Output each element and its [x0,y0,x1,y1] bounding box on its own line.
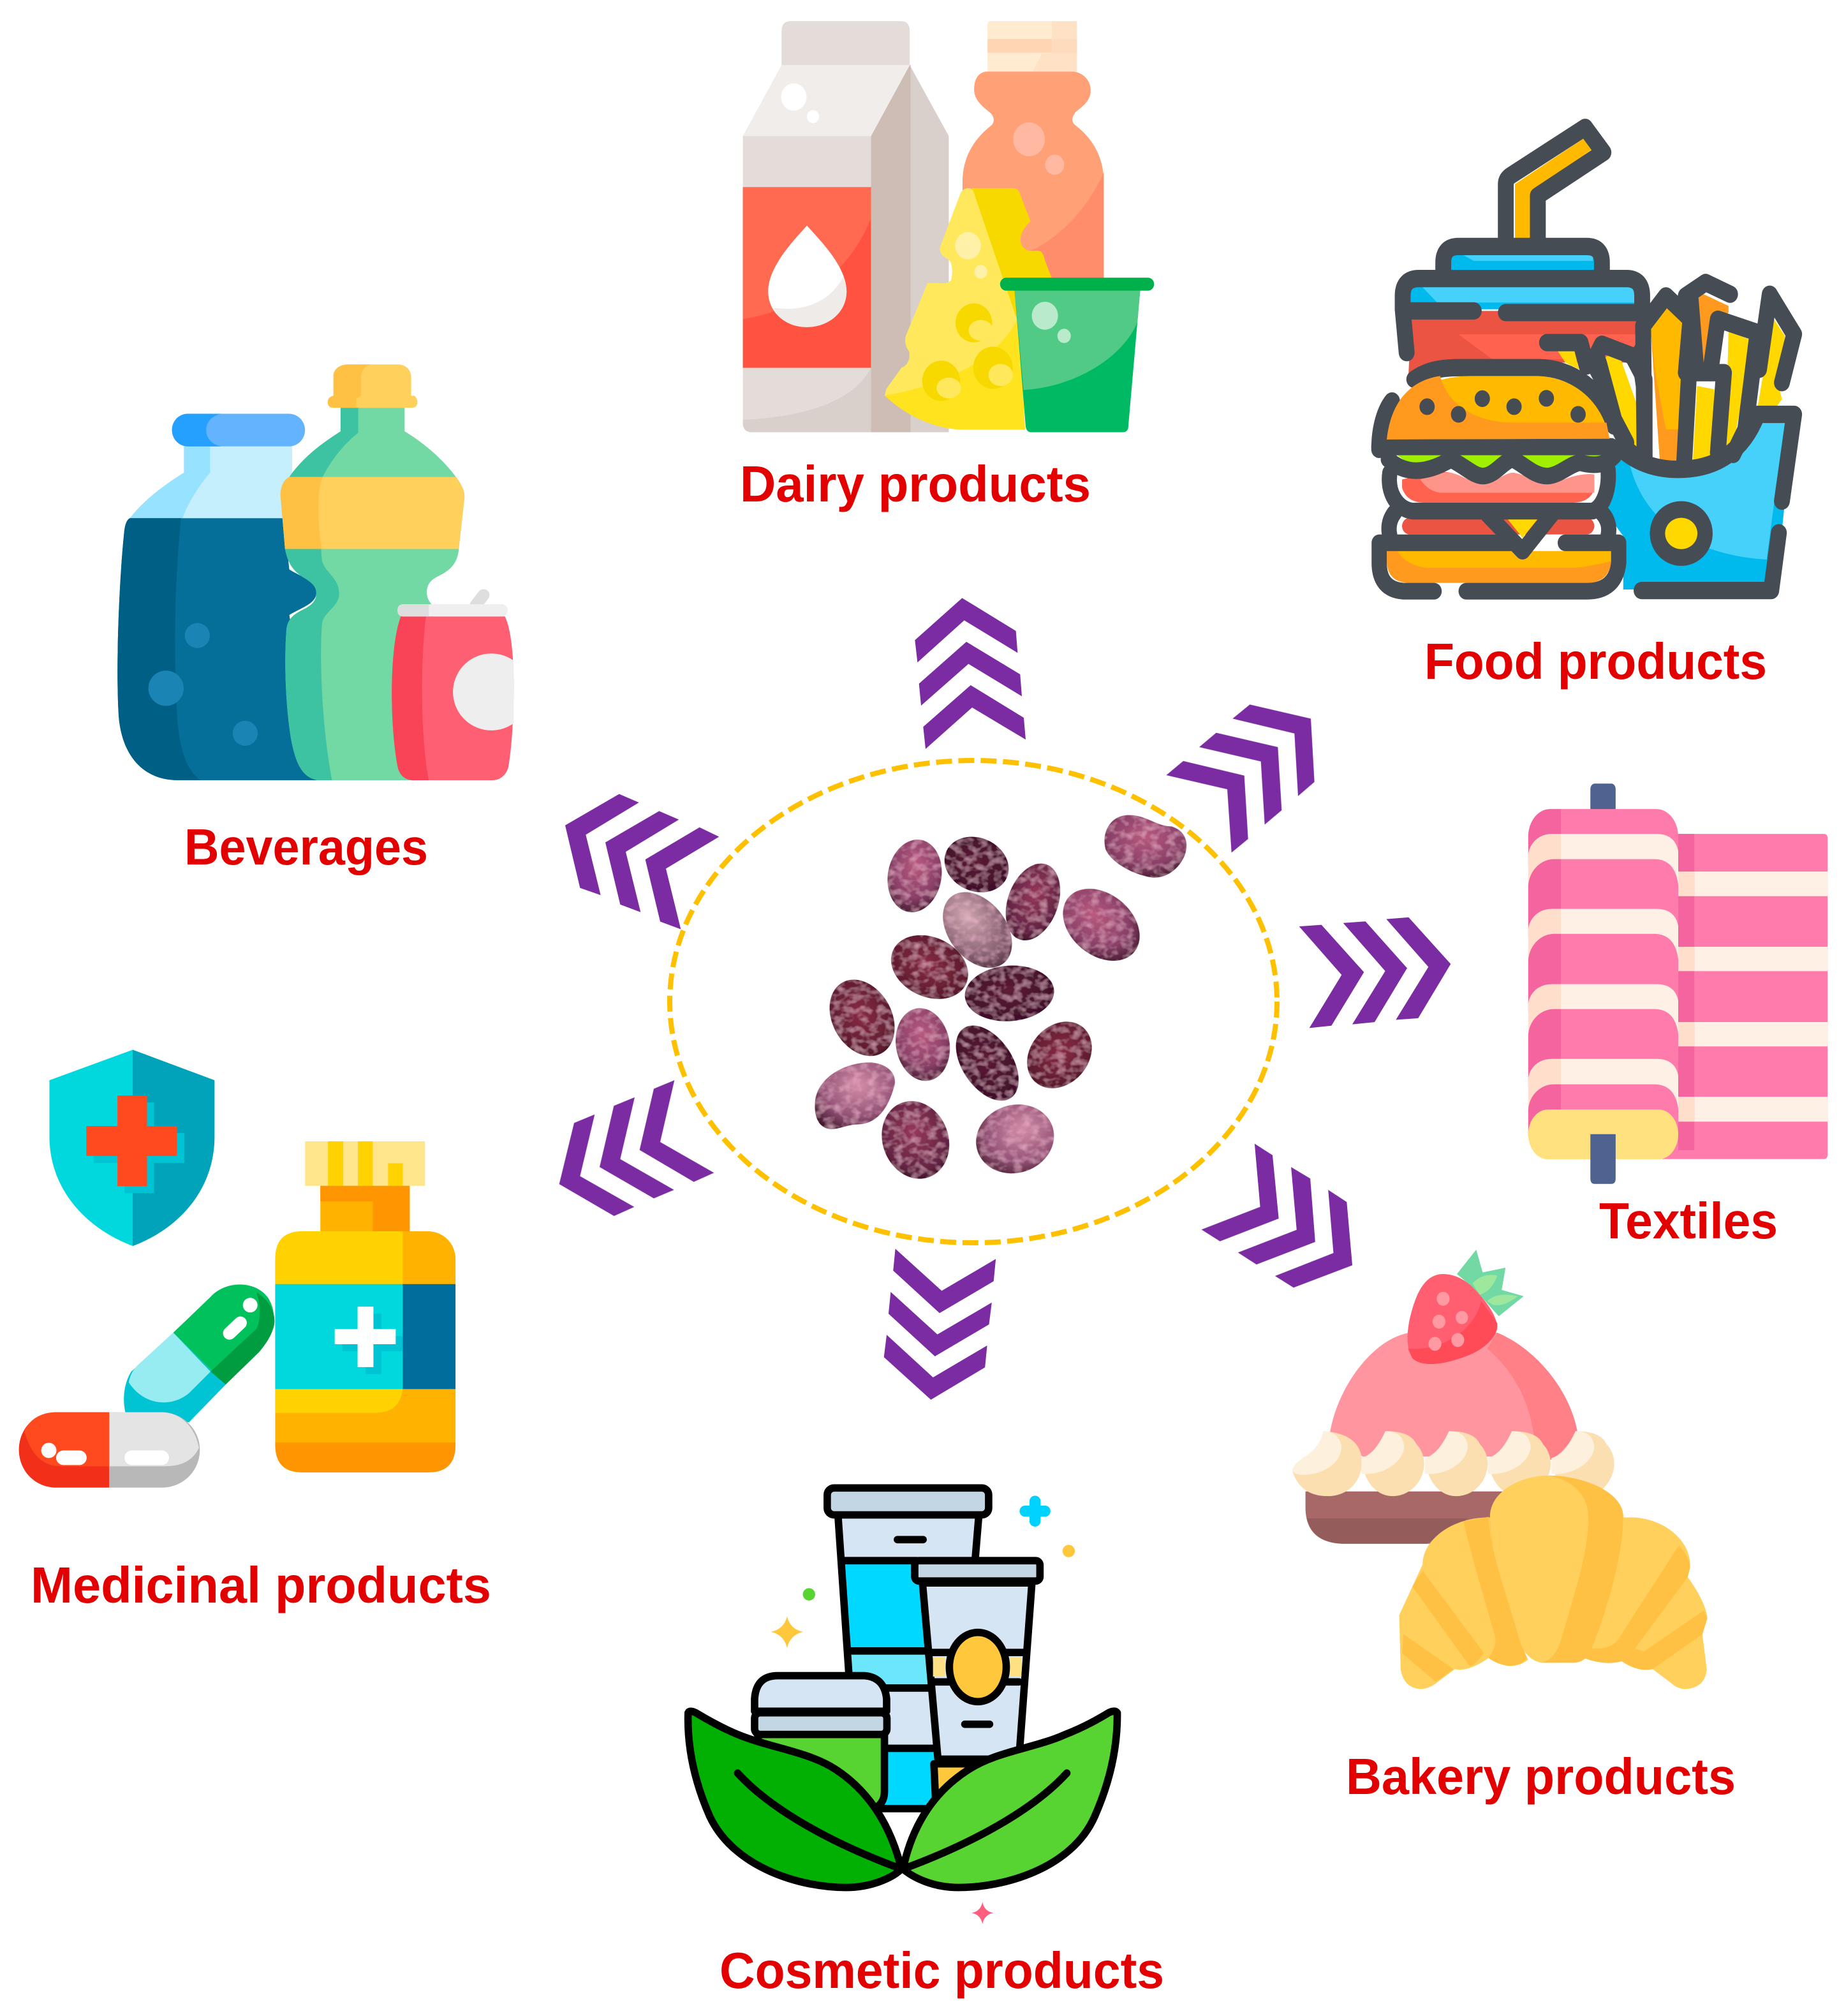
icon: medicinal products [19,1049,455,1488]
label: Textiles: Textiles [1599,1192,1778,1249]
icon: cosmetic products [688,1488,1118,1924]
label: Beverages: Beverages [184,819,428,875]
arrow: north-west to beverages [565,794,719,930]
label: Food products: Food products [1424,633,1767,690]
arrow: up to dairy products [915,598,1026,749]
arrow: east to textiles [1299,917,1451,1028]
icon: food products [1379,128,1794,591]
arrow: south-east to bakery products [1201,1144,1352,1287]
label: Cosmetic products: Cosmetic products [720,1942,1164,1999]
dashed ellipse around beans [670,760,1277,1243]
icon: beverages [117,364,513,780]
arrow: south to cosmetic products [884,1249,996,1400]
icon: textiles [1528,783,1828,1184]
label: Dairy products: Dairy products [740,456,1091,512]
arrow: north-east to food products [1166,704,1315,852]
photo: purple beans [815,815,1186,1182]
arrow: south-west to medicinal products [559,1080,714,1216]
icon: dairy products [743,21,1154,433]
icon: bakery products [1292,1250,1708,1689]
label: Medicinal products: Medicinal products [31,1557,491,1613]
label: Bakery products: Bakery products [1346,1748,1736,1805]
